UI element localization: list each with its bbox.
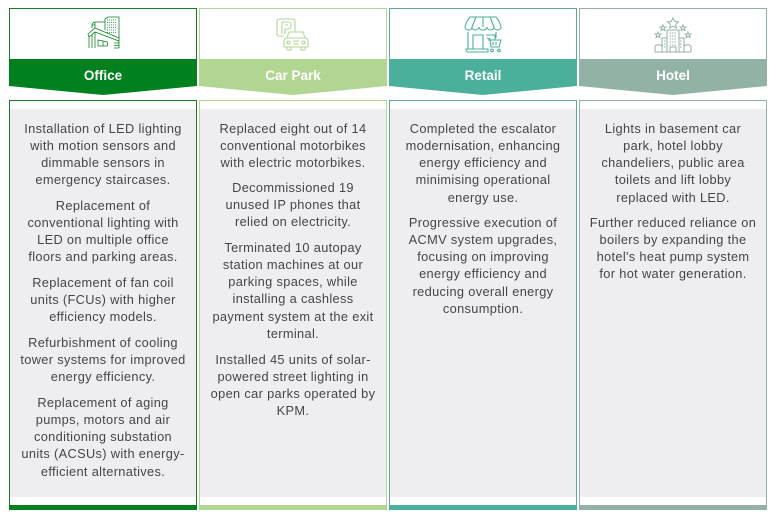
text block: electric motorbikes: conventional motorbikes	[220, 138, 366, 153]
text block: escalator modernisation: modernisation, enhancing	[406, 138, 560, 153]
text block: ACMV upgrades: focusing on improving	[417, 249, 549, 264]
header band: Office: Office	[84, 68, 122, 83]
text block: electric motorbikes: with electric motorbikes.	[220, 155, 366, 170]
header band: Retail: Retail	[465, 68, 501, 83]
header box: Office	[9, 8, 197, 59]
text block: LED lighting	[24, 121, 182, 187]
text block: fan coil units: efficiency models.	[49, 309, 157, 324]
text block: pumps and motors: conditioning substation	[34, 429, 172, 444]
header band: Car Park: Car Park	[265, 68, 321, 83]
header band: Office	[9, 59, 197, 95]
text block: escalator modernisation: energy efficiency and	[419, 155, 547, 170]
text block: fan coil units: units (FCUs) with higher	[30, 292, 176, 307]
text block: LED lighting: dimmable sensors in	[41, 155, 165, 170]
text panel: Retail	[389, 100, 577, 510]
text block: fan coil units	[30, 275, 176, 324]
text block: escalator modernisation: minimising operational	[416, 172, 550, 187]
text block: autopay machines: station machines at our	[223, 257, 363, 272]
text block: cooling tower: energy efficiency.	[51, 369, 155, 384]
column: Hotel	[579, 8, 767, 510]
text block: conventional lighting: floors and parking areas.	[28, 249, 178, 264]
text panel: Hotel	[579, 100, 767, 510]
text block: autopay machines: payment system at the exit	[212, 309, 374, 324]
header band: Retail	[389, 59, 577, 95]
footer bar: Office	[9, 505, 197, 510]
text block: pumps and motors: units (ACSUs) with energy-	[21, 446, 185, 461]
text block: pumps and motors: pumps, motors and air	[36, 412, 170, 427]
text block: ACMV upgrades: Progressive execution of	[409, 215, 557, 230]
text block: LED replacement: toilets and lift lobby	[615, 172, 731, 187]
text block: ACMV upgrades: reducing overall energy	[413, 284, 553, 299]
text block: IP phones	[226, 180, 360, 229]
text block: LED lighting: emergency staircases.	[35, 172, 171, 187]
header band: Hotel: Hotel	[656, 68, 690, 83]
text panel: Office	[9, 100, 197, 510]
text block: heat pump: for hot water generation.	[599, 266, 747, 281]
text panel: Car Park	[199, 100, 387, 510]
text block: conventional lighting: Replacement of	[56, 198, 150, 213]
text block: LED replacement	[601, 121, 745, 205]
text block: LED replacement: park, hotel lobby	[623, 138, 723, 153]
icon: office building	[88, 16, 120, 48]
text block: cooling tower	[20, 335, 186, 384]
header box: Hotel	[579, 8, 767, 59]
footer bar: Retail	[389, 505, 577, 510]
text block: escalator modernisation	[406, 121, 560, 205]
text block: conventional lighting: conventional lighting with	[27, 215, 179, 230]
text block: ACMV upgrades	[408, 215, 557, 316]
header box: Retail	[389, 8, 577, 59]
text block: heat pump	[590, 215, 756, 281]
text block: heat pump: Further reduced reliance on	[590, 215, 756, 230]
icon: shop and trolley	[464, 16, 502, 52]
text block: LED lighting: with motion sensors and	[30, 138, 176, 153]
text block: autopay machines: Terminated 10 autopay	[224, 240, 362, 255]
text block: IP phones: unused IP phones that	[226, 197, 360, 212]
text block: solar street lighting: open car parks operated by	[211, 386, 375, 401]
text block: conventional lighting: LED on multiple office	[37, 232, 169, 247]
header band: Hotel	[579, 59, 767, 95]
text block: IP phones: relied on electricity.	[235, 214, 351, 229]
text block: cooling tower: tower systems for improved	[20, 352, 186, 367]
text block: solar street lighting: powered street lighting in	[217, 369, 369, 384]
icon: hotel with stars	[654, 17, 692, 52]
footer bar: Hotel	[579, 505, 767, 510]
text block: cooling tower: Refurbishment of cooling	[28, 335, 178, 350]
text block: solar street lighting	[211, 352, 375, 418]
column: Car Park	[199, 8, 387, 510]
text block: LED replacement: replaced with LED.	[616, 190, 730, 205]
text block: LED replacement: chandeliers, public area	[601, 155, 745, 170]
text block: fan coil units: Replacement of fan coil	[32, 275, 174, 290]
text block: LED replacement: Lights in basement car	[605, 121, 741, 136]
text block: pumps and motors: Replacement of aging	[37, 395, 169, 410]
text block: ACMV upgrades: ACMV system upgrades,	[409, 232, 557, 247]
text block: escalator modernisation: Completed the escalator	[410, 121, 556, 136]
column: Office	[9, 8, 197, 510]
text block: heat pump: boilers by expanding the	[600, 232, 746, 247]
text block: pumps and motors	[21, 395, 185, 479]
text block: solar street lighting: KPM.	[277, 403, 309, 418]
header box: Car Park	[199, 8, 387, 59]
text block: electric motorbikes: Replaced eight out of 14	[220, 121, 366, 136]
text block: autopay machines: installing a cashless	[233, 291, 353, 306]
text block: solar street lighting: Installed 45 units of solar-	[215, 352, 371, 367]
text block: autopay machines: parking spaces, while	[228, 274, 358, 289]
column: Retail	[389, 8, 577, 510]
footer bar: Car Park	[199, 505, 387, 510]
text block: LED lighting: Installation of LED lighting	[24, 121, 182, 136]
text block: pumps and motors: efficient alternatives.	[41, 464, 165, 479]
text block: ACMV upgrades: consumption.	[443, 301, 523, 316]
text block: heat pump: hotel's heat pump system	[597, 249, 749, 264]
text block: ACMV upgrades: energy efficiency and	[419, 266, 547, 281]
icon: parking sign and car	[276, 18, 309, 50]
header band: Car Park	[199, 59, 387, 95]
text block: electric motorbikes	[220, 121, 366, 170]
text block: autopay machines	[212, 240, 374, 341]
text block: escalator modernisation: energy use.	[448, 190, 518, 205]
text block: IP phones: Decommissioned 19	[232, 180, 354, 195]
text block: conventional lighting	[27, 198, 179, 264]
text block: autopay machines: terminal.	[267, 326, 319, 341]
